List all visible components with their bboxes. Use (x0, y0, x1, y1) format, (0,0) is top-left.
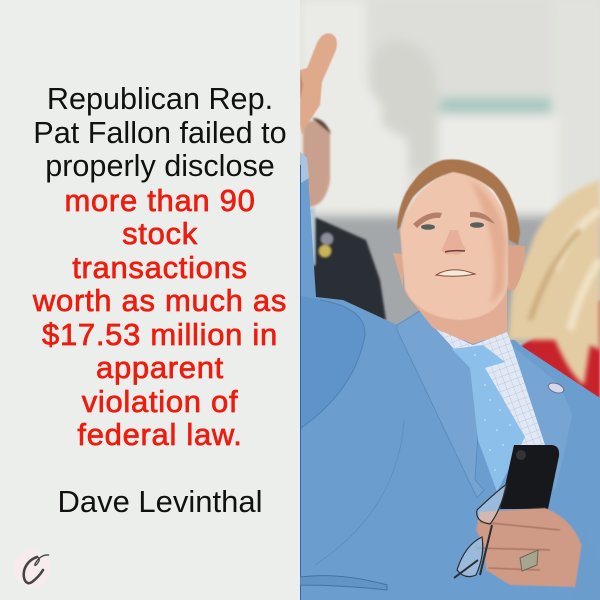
quote text: transactions (72, 250, 248, 285)
quote text: Pat Fallon failed to (33, 116, 287, 150)
quote text: apparent (96, 350, 224, 385)
Capitol background (300, 0, 600, 600)
glasses (454, 484, 507, 578)
quote text: more than 90 (64, 183, 256, 218)
icon: brand logo (14, 550, 50, 588)
hand with ring (476, 508, 600, 600)
background man in dark suit (300, 118, 386, 330)
shirt and tie (435, 328, 565, 492)
lapel (397, 311, 484, 498)
quote text: federal law. (77, 417, 243, 452)
quote text: stock (122, 216, 198, 251)
phone (484, 445, 559, 568)
neck and face (393, 159, 525, 344)
subject: suit jacket (300, 152, 600, 600)
raised hand (300, 33, 337, 135)
photo: congressman gesturing on Capitol steps (300, 0, 600, 600)
quote text (32, 82, 287, 452)
quote text: Republican Rep. (47, 82, 273, 116)
byline: author: Dave Levinthal (57, 484, 263, 519)
ring (520, 550, 538, 571)
quote text: worth as much as (33, 283, 287, 318)
lapel pin (547, 381, 565, 395)
quote text: violation of (82, 384, 238, 419)
blonde woman in red (508, 180, 600, 400)
quote text: $17.53 million in (42, 317, 278, 352)
pocket (300, 576, 387, 590)
raised sleeve underside (301, 296, 365, 428)
quote text: properly disclose (45, 149, 275, 183)
